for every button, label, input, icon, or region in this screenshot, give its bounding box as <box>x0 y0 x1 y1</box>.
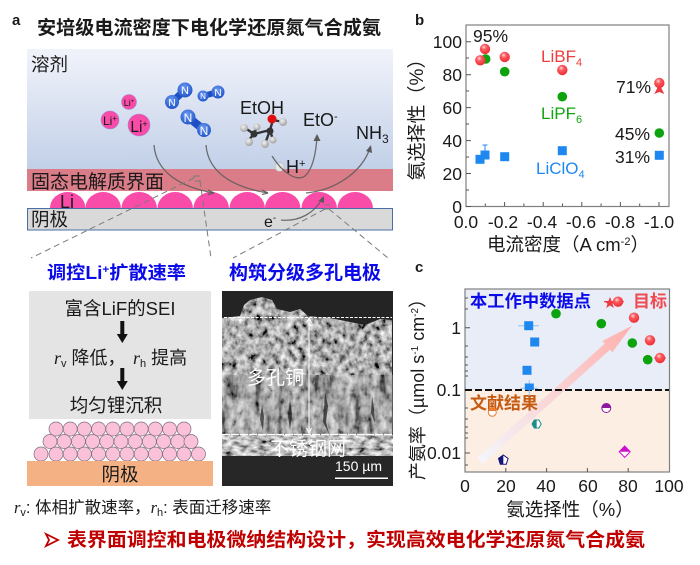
ticks <box>465 298 628 472</box>
chart: selectivity vs current density: LiPF <box>541 104 576 123</box>
y axis title: 产氨率（µmol s <box>408 355 428 480</box>
x tick labels: 0 <box>460 476 470 496</box>
rate definitions: r <box>14 498 21 517</box>
y tick labels: 1 <box>451 318 461 338</box>
literature points <box>488 404 630 464</box>
rate definitions: v <box>20 507 26 519</box>
Li label: Li <box>60 192 74 212</box>
lithium ions: Li <box>103 114 112 128</box>
step 1: 富含LiF的SEI <box>64 298 176 319</box>
step 2: r <box>54 348 62 368</box>
y tick labels: 40 <box>443 131 462 151</box>
rate definitions: r <box>151 498 158 517</box>
proton <box>275 157 305 177</box>
reaction arrows <box>154 134 372 220</box>
cathode label: 阴极 <box>31 209 68 230</box>
y axis title: ） <box>408 290 428 308</box>
porous copper label: 多孔铜 <box>247 367 304 389</box>
y tick labels: 20 <box>443 164 462 184</box>
x axis title: ） <box>630 234 649 255</box>
frame <box>466 25 669 206</box>
this work region <box>465 289 670 390</box>
NH3 label: NH <box>356 123 382 143</box>
panel: porous electrode heading: 构筑分级多孔电极 <box>229 261 381 284</box>
proton: H <box>286 157 299 177</box>
panel: Li+ diffusion heading: 扩散速率 <box>109 263 186 283</box>
x tick labels <box>460 476 684 496</box>
nitrogen molecules: N <box>214 88 222 99</box>
panel: SEI flow box <box>29 291 211 419</box>
nitrogen molecules: N <box>181 85 189 97</box>
zoom-in dashed guides <box>31 176 388 258</box>
y tick labels: 0.1 <box>437 380 461 400</box>
chart: selectivity vs current density <box>406 25 674 255</box>
x axis title: 氨选择性（%） <box>506 499 634 520</box>
y tick labels <box>433 32 462 217</box>
SEI label: 固态电解质界面 <box>31 171 164 193</box>
lithium deposits <box>50 192 373 208</box>
x tick labels: 0.0 <box>454 212 478 232</box>
cathode base <box>27 461 213 486</box>
threshold line <box>465 389 669 391</box>
EtO- label: - <box>334 111 338 123</box>
rate definitions: : 体相扩散速率， <box>26 498 151 517</box>
solvent layer <box>27 49 393 169</box>
ticks <box>466 42 659 207</box>
panel: Li+ diffusion heading: + <box>102 264 109 276</box>
this work label: 本工作中数据点 <box>470 292 591 311</box>
x tick labels: 20 <box>496 476 516 496</box>
EtO- label: EtO <box>303 110 334 130</box>
arrow down <box>117 321 128 343</box>
x tick labels: -1.0 <box>644 212 674 232</box>
ethanol molecule <box>240 98 287 148</box>
literature region <box>465 390 670 472</box>
frame <box>465 289 670 472</box>
step 2: 提高 <box>146 348 187 368</box>
proton: + <box>299 158 305 170</box>
y axis title: -2 <box>410 307 421 317</box>
y tick labels: 0.01 <box>427 443 461 463</box>
work points: blue <box>518 321 539 396</box>
data labels: 95% <box>473 26 508 46</box>
cathode <box>28 208 392 230</box>
electron label: - <box>273 213 276 224</box>
LiClO4 series <box>476 145 664 164</box>
panel: electrolyte diagram <box>27 49 393 258</box>
literature label: 文献结果 <box>470 393 538 413</box>
rate definitions: h <box>157 507 163 519</box>
conclusion: 表界面调控和电极微纳结构设计，实现高效电化学还原氮气合成氨 <box>67 528 645 551</box>
chart: selectivity vs current density: 4 <box>579 169 585 181</box>
y tick labels <box>427 318 461 463</box>
panel b label: b <box>415 12 424 29</box>
x tick labels: 40 <box>536 476 556 496</box>
y axis title: 氨选择性（%） <box>406 50 428 180</box>
y tick labels: 0 <box>452 197 462 217</box>
nitrogen molecules: N <box>200 124 208 138</box>
step 2: 降低， <box>67 348 126 368</box>
series labels: LiBF <box>541 47 576 66</box>
y axis title: -1 <box>410 345 421 355</box>
SEM guide lines <box>224 316 392 318</box>
work points: red <box>604 296 666 363</box>
chart: selectivity vs current density: 71% <box>616 77 651 97</box>
x tick labels: -0.8 <box>605 212 635 232</box>
x tick labels: 100 <box>654 476 684 496</box>
x axis title: -2 <box>621 236 630 248</box>
scale bar: 150 µm <box>335 458 382 474</box>
cathode base: 阴极 <box>101 464 139 485</box>
solvent label: 溶剂 <box>31 54 68 75</box>
x tick labels: 80 <box>618 476 638 496</box>
step 2: v <box>61 358 67 370</box>
lithium ions <box>101 94 150 136</box>
chart: selectivity vs current density: LiClO <box>536 159 579 178</box>
title: 安培级电流密度下电化学还原氮气合成氨 <box>37 16 381 39</box>
chart: selectivity vs current density: 6 <box>576 114 582 126</box>
lithium ions: + <box>112 114 117 123</box>
SEI layer <box>27 169 393 191</box>
y tick labels: 60 <box>443 98 462 118</box>
nitrogen molecules: N <box>184 111 192 125</box>
LiPF6 series <box>481 54 664 138</box>
steel mesh label: 不锈钢网 <box>270 438 346 460</box>
lithium ions: + <box>131 99 135 105</box>
work points: green <box>551 309 652 365</box>
target label: 目标 <box>633 292 667 311</box>
x tick labels: 60 <box>578 476 598 496</box>
arrow down <box>117 368 128 390</box>
chart: selectivity vs current density: 31% <box>615 147 650 167</box>
y tick labels: 100 <box>433 32 462 52</box>
SEM micrograph <box>222 291 393 486</box>
nitrogen molecules <box>165 82 224 138</box>
nitrogen molecules: N <box>168 98 176 109</box>
panel: Li+ diffusion heading: 调控Li <box>47 263 99 283</box>
step 3: 均匀锂沉积 <box>70 395 162 416</box>
chart: selectivity vs current density: 45% <box>615 124 650 144</box>
x tick labels <box>454 212 674 232</box>
step 2: h <box>140 358 146 370</box>
ethanol molecule: EtOH <box>240 98 284 118</box>
thickness arrow <box>306 318 312 433</box>
lithium ions: + <box>142 119 148 129</box>
step 2: r <box>133 348 141 368</box>
LiBF4 series <box>475 44 664 94</box>
lithium ions: Li <box>130 119 142 136</box>
target arrow <box>477 326 632 464</box>
panel a label: a <box>12 12 21 29</box>
lithium spheres stack <box>34 422 206 461</box>
chart: yield rate vs selectivity <box>408 289 684 520</box>
lithium ions: Li <box>124 98 131 108</box>
y axis title: cm <box>408 317 428 346</box>
rate definitions: : 表面迁移速率 <box>163 498 271 517</box>
panel c label: c <box>415 259 423 276</box>
series labels: 4 <box>576 57 582 69</box>
nitrogen molecules: N <box>200 92 206 101</box>
x axis title: 电流密度（A cm <box>487 234 621 255</box>
x tick labels: -0.2 <box>488 212 518 232</box>
NH3 label: 3 <box>382 132 389 146</box>
x tick labels: -0.4 <box>527 212 557 232</box>
y tick labels: 80 <box>443 65 462 85</box>
electron label: e <box>264 214 273 231</box>
x tick labels: -0.6 <box>566 212 596 232</box>
